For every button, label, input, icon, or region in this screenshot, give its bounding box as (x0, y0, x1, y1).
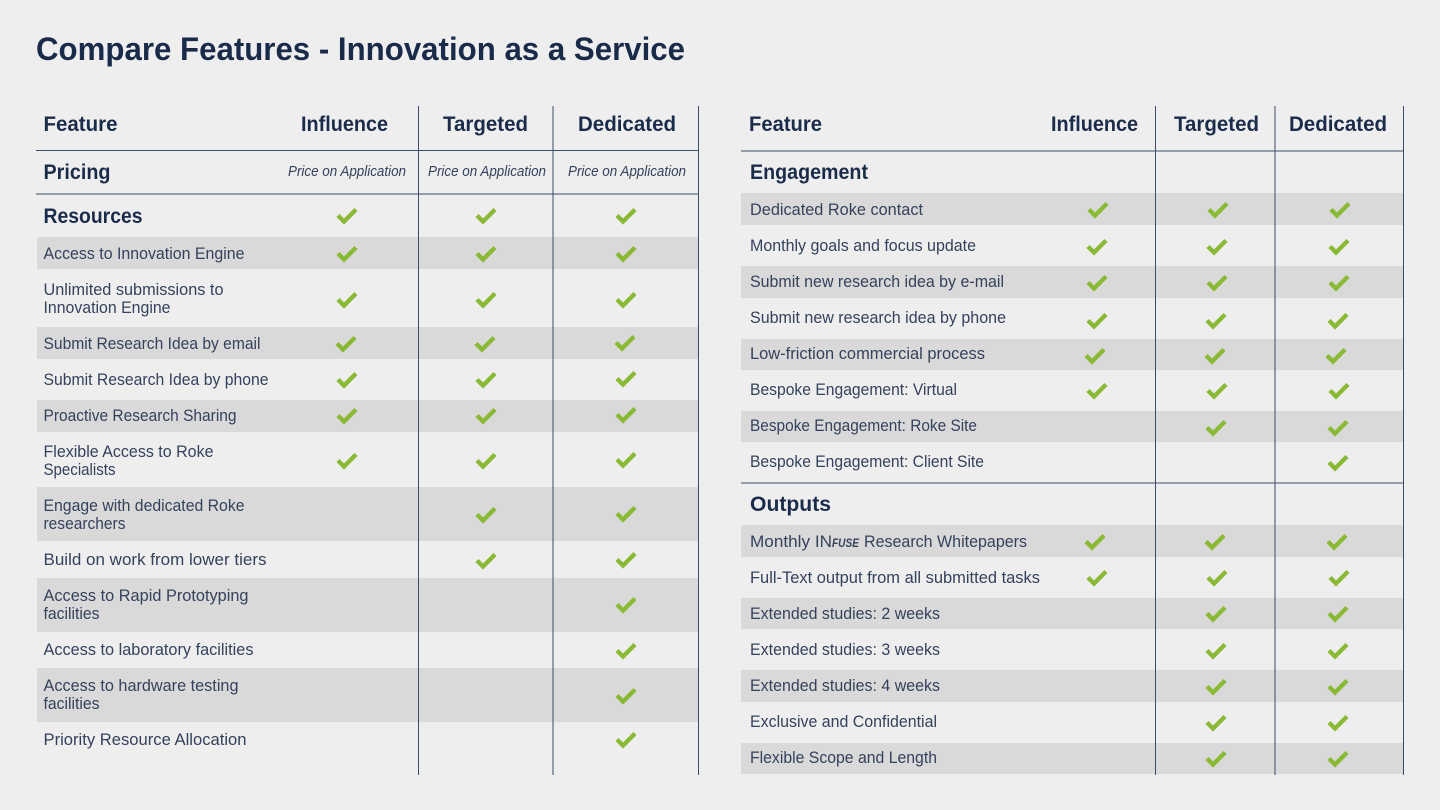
row: engage with researchers: researchers (44, 515, 126, 533)
row: priority resource allocation (44, 731, 635, 749)
header row: left table: Dedicated (578, 113, 676, 136)
row: monthly goals (750, 237, 1348, 255)
row: submit by phone (44, 371, 635, 389)
row: submit by email: Submit Research Idea by email (44, 335, 260, 353)
row: submit by email (37, 327, 698, 359)
row: submit idea by e-mail (741, 266, 1404, 298)
row: bespoke roke site: Bespoke Engagement: Roke Site (750, 417, 977, 435)
row: laboratory facilities (44, 641, 635, 659)
row: bespoke client site (750, 453, 1347, 471)
row: monthly infuse whitepapers (741, 525, 1404, 557)
row: engage with researchers (37, 487, 698, 541)
row: monthly infuse whitepapers: Monthly IN (750, 533, 832, 551)
row: bespoke virtual (750, 381, 1348, 399)
row: flexible scope and length (741, 743, 1404, 774)
row: submit idea by phone: Submit new research idea by phone (750, 309, 1006, 327)
row: dedicated roke contact: Dedicated Roke contact (750, 201, 923, 219)
row: submit idea by phone (750, 309, 1347, 327)
section heading: resources: Resources (44, 205, 142, 228)
header row: right table (749, 113, 1387, 136)
row: hardware testing: facilities (44, 695, 100, 713)
section heading: resources (44, 205, 635, 228)
row: unlimited submissions (44, 281, 635, 317)
row: exclusive and confidential: Exclusive and Confidential (750, 713, 937, 731)
row: monthly goals: Monthly goals and focus update (750, 237, 976, 255)
row: pricing: Price on Application (568, 163, 686, 180)
row: access to innovation engine: Access to Innovation Engine (44, 245, 244, 263)
row: unlimited submissions: Innovation Engine (44, 299, 170, 317)
row: flexible scope and length: Flexible Scope and Length (750, 749, 937, 767)
row: monthly infuse whitepapers: FUSE (832, 536, 860, 550)
row: monthly infuse whitepapers: Research Whitepapers (864, 533, 1027, 551)
row: pricing: Price on Application (428, 163, 546, 180)
row: priority resource allocation: Priority Resource Allocation (44, 731, 246, 749)
row: bespoke roke site (741, 411, 1404, 442)
row: pricing: Price on Application (288, 163, 406, 180)
row: access to innovation engine (37, 237, 698, 269)
row: low-friction commercial process: Low-friction commercial process (750, 345, 985, 363)
header row: left table (44, 113, 676, 136)
header row: left table: Targeted (443, 113, 528, 136)
row: pricing: Pricing (44, 161, 110, 184)
row: low-friction commercial process (741, 339, 1404, 370)
panel: right comparison table (741, 106, 1404, 775)
row: pricing (44, 161, 686, 184)
section heading: outputs: Outputs (750, 493, 831, 516)
row: exclusive and confidential (750, 713, 1347, 731)
row: dedicated roke contact (741, 193, 1404, 225)
row: rapid prototyping: facilities (44, 605, 100, 623)
row: proactive research sharing: Proactive Research Sharing (44, 407, 236, 425)
header row: right table: Targeted (1174, 113, 1259, 136)
header row: right table: Dedicated (1289, 113, 1387, 136)
row: extended studies 2 weeks: Extended studies: 2 weeks (750, 605, 940, 623)
header row: left table: Influence (301, 113, 388, 136)
row: extended studies 3 weeks: Extended studies: 3 weeks (750, 641, 940, 659)
row: flexible access: Flexible Access to Roke (44, 443, 214, 461)
row: extended studies 4 weeks (741, 670, 1404, 702)
row: extended studies 2 weeks (741, 598, 1404, 629)
header row: right table: Feature (749, 113, 822, 136)
header row: left table: Feature (44, 113, 118, 136)
row: laboratory facilities: Access to laboratory facilities (44, 641, 254, 659)
row: hardware testing (37, 668, 698, 722)
row: rapid prototyping: Access to Rapid Prototyping (44, 587, 248, 605)
section heading: engagement: Engagement (750, 161, 868, 184)
row: rapid prototyping (37, 578, 698, 632)
row: full-text output: Full-Text output from all submitted tasks (750, 569, 1040, 587)
row: extended studies 3 weeks (750, 641, 1347, 659)
row: bespoke client site: Bespoke Engagement: Client Site (750, 453, 984, 471)
header row: right table: Influence (1051, 113, 1138, 136)
panel: left comparison table (36, 106, 698, 775)
row: build on work (44, 551, 635, 569)
row: build on work: Build on work from lower tiers (44, 551, 266, 569)
row: flexible access (44, 443, 635, 479)
title: Compare Features - Innovation as a Service (36, 31, 685, 67)
row: flexible access: Specialists (44, 461, 116, 479)
row: extended studies 4 weeks: Extended studies: 4 weeks (750, 677, 940, 695)
row: hardware testing: Access to hardware testing (44, 677, 238, 695)
row: submit idea by e-mail: Submit new research idea by e-mail (750, 273, 1004, 291)
row: engage with researchers: Engage with dedicated Roke (44, 497, 244, 515)
row: proactive research sharing (37, 400, 698, 432)
row: submit by phone: Submit Research Idea by phone (44, 371, 268, 389)
row: full-text output (750, 569, 1348, 587)
row: unlimited submissions: Unlimited submissions to (44, 281, 224, 299)
row: bespoke virtual: Bespoke Engagement: Virtual (750, 381, 957, 399)
